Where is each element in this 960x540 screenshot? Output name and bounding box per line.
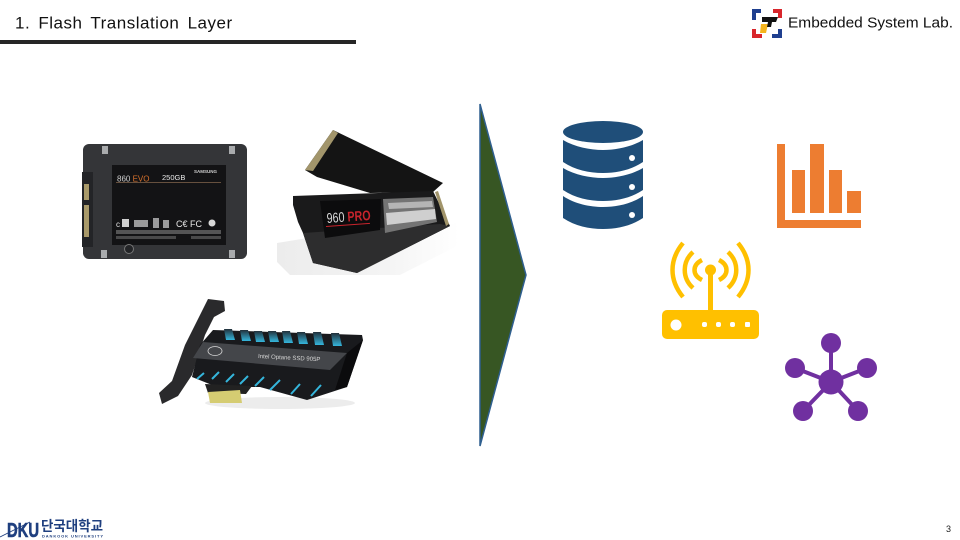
page number: 3 xyxy=(946,524,951,534)
M.2 SSD image: 960 PRO xyxy=(326,207,371,226)
university logo: DANKOOK UNIVERSITY xyxy=(42,534,103,538)
title xyxy=(0,14,356,44)
PCIe SSD image xyxy=(159,299,363,409)
title: 1. Flash Translation Layer xyxy=(15,14,233,32)
lab name: Embedded System Lab. xyxy=(788,16,953,32)
SATA SSD image: 860 EVO xyxy=(117,174,149,184)
M.2 SSD image xyxy=(277,130,459,275)
icon: wireless router xyxy=(662,243,759,339)
university logo xyxy=(0,518,103,540)
icon: network hub xyxy=(785,333,877,421)
PCIe SSD image: Intel Optane SSD 905P xyxy=(258,354,320,363)
lab logo xyxy=(752,9,782,38)
icon: database xyxy=(563,121,643,229)
SATA SSD image: c xyxy=(116,220,120,229)
divider arrow xyxy=(480,104,526,446)
SATA SSD image: C€ FC xyxy=(176,219,203,229)
SATA SSD image: SAMSUNG xyxy=(194,169,218,174)
SATA SSD image xyxy=(82,144,247,259)
icon: bar chart xyxy=(777,144,861,228)
SATA SSD image: 250GB xyxy=(162,173,185,182)
university logo: 단국대학교 xyxy=(41,518,103,534)
